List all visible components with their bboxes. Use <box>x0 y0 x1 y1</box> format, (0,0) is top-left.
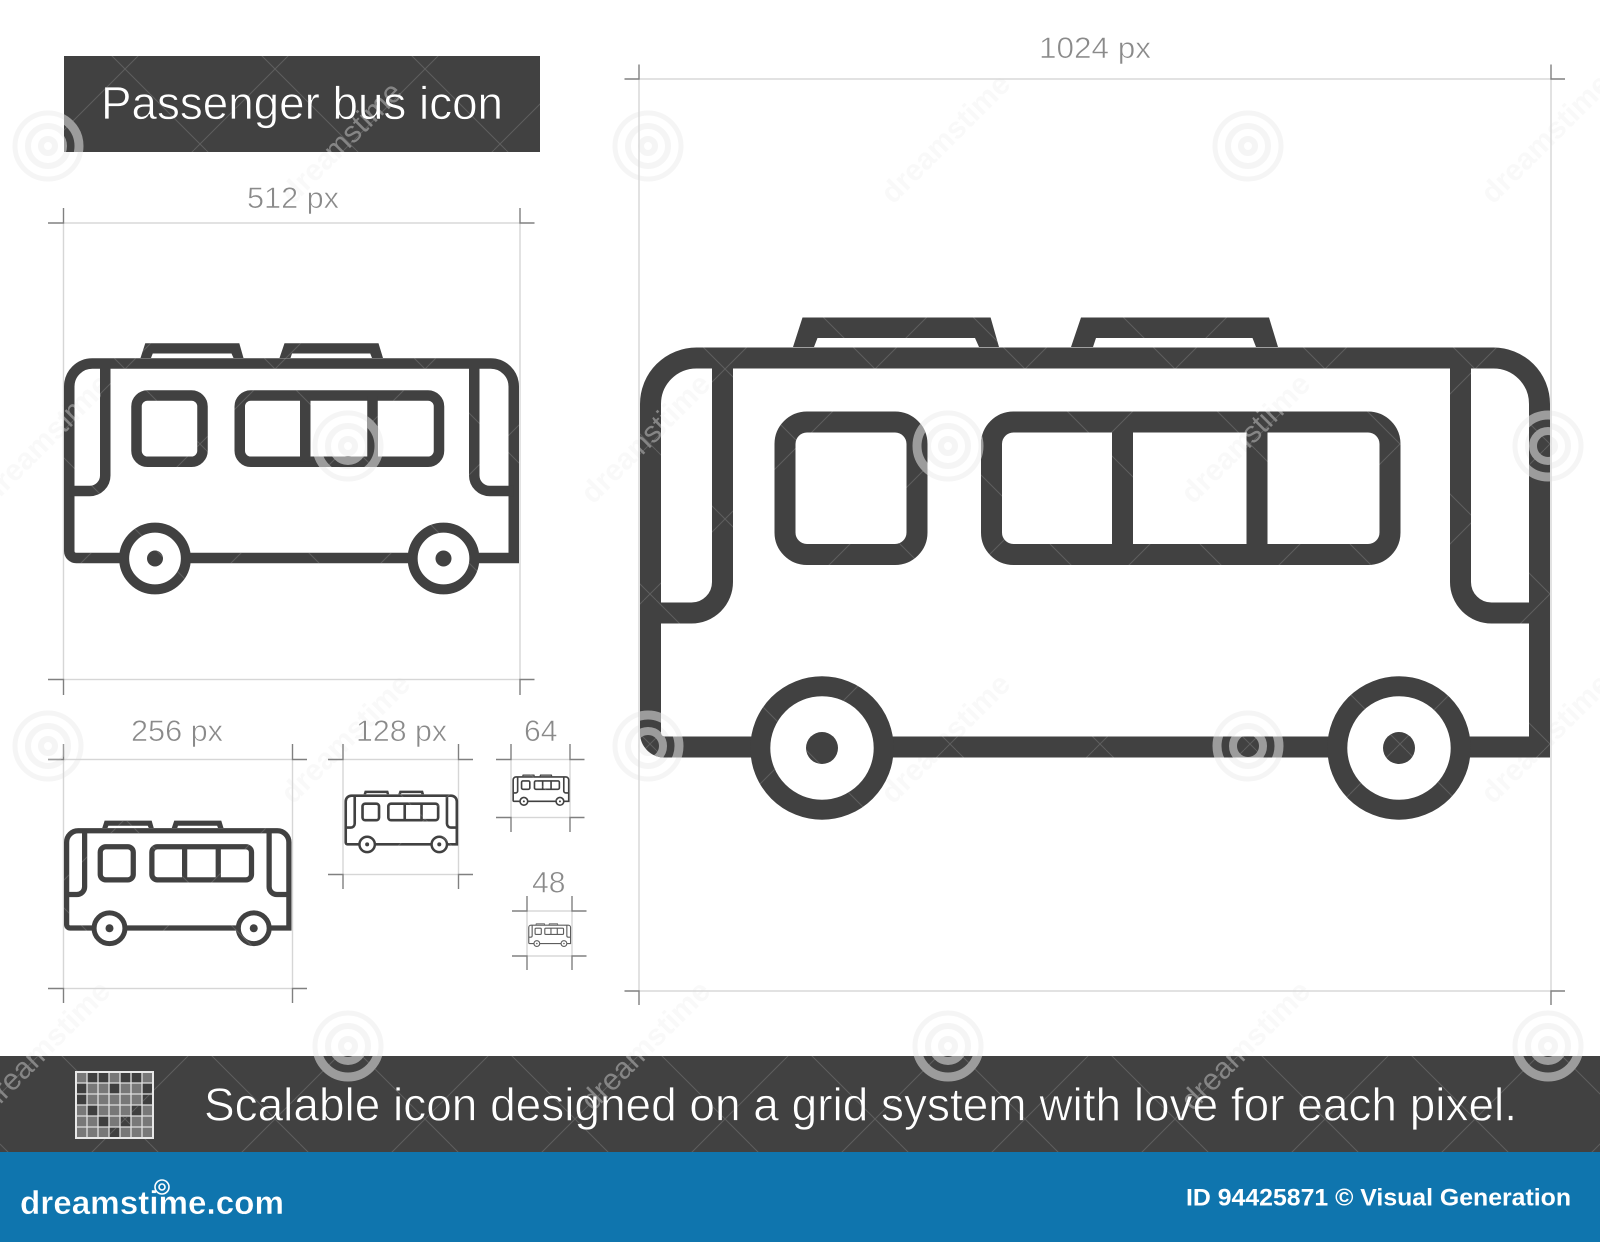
panel: 128 px icon <box>328 715 473 889</box>
dimension label: 64: 64 <box>524 715 558 748</box>
watermark: faint spirals and wordmarks: dreamstime <box>875 68 1017 210</box>
watermark overlay on dark areas: dreamstime <box>575 983 709 1117</box>
image ID and credit: ID 94425871 © Visual Generation <box>1186 1184 1571 1212</box>
title banner <box>64 56 540 152</box>
guides: 1024 px <box>624 64 1565 1005</box>
watermark: faint spirals and wordmarks: dreamstime <box>275 68 417 210</box>
watermark: faint spirals and wordmarks: dreamstime <box>1175 368 1317 510</box>
dimension label: 48: 48 <box>532 866 566 900</box>
guides: 512 px <box>48 208 534 695</box>
guides: 128 px <box>328 744 473 889</box>
dimension label: 512 px: 512 px <box>247 182 339 215</box>
watermark overlay on dark areas: dreamstime <box>575 376 709 510</box>
watermark overlay on dark areas: dreamstime <box>275 76 409 210</box>
icon: 128 px bus <box>346 791 457 852</box>
icon: pixel grid with heart <box>76 1072 153 1138</box>
dimension label: 128 px: 128 px <box>356 715 447 748</box>
icon: 48 px bus <box>529 923 571 946</box>
panel: 48 px icon <box>512 866 586 970</box>
icon: 64 px bus <box>513 774 569 805</box>
watermark overlay on dark areas: dreamstime <box>1175 376 1309 510</box>
watermark: faint spirals and wordmarks: dreamstime <box>575 975 717 1117</box>
title banner: Passenger bus icon <box>101 77 503 129</box>
panel: 512 px icon <box>48 182 534 695</box>
tagline: Scalable icon designed on a grid system with love for each pixel. <box>204 1078 1517 1130</box>
footer band: grid system message <box>0 1056 1600 1152</box>
watermark: faint spirals and wordmarks: dreamstime <box>1175 975 1317 1117</box>
guides: 256 px <box>48 744 307 1003</box>
watermark: faint spirals and wordmarks: dreamstime <box>575 368 717 510</box>
credit bar <box>0 1152 1600 1242</box>
panel: 1024 px icon <box>624 32 1565 1005</box>
dimension label: 256 px: 256 px <box>131 715 223 748</box>
logo wordmark: dreamstime.com <box>20 1184 284 1221</box>
panel: 256 px icon <box>48 715 307 1003</box>
icon: large bus <box>650 318 1540 810</box>
guides: 48 px <box>512 896 586 970</box>
panel: 64 px icon <box>496 715 584 832</box>
dimension label: 1024 px: 1024 px <box>1039 32 1151 65</box>
watermark: faint spirals and wordmarks: dreamstime <box>875 668 1017 810</box>
watermark: faint spirals and wordmarks: dreamstime <box>275 668 417 810</box>
icon: 256 px bus <box>67 821 289 944</box>
watermark overlay on dark areas: dreamstime <box>1175 983 1309 1117</box>
guides: 64 px <box>496 744 584 832</box>
icon: 512 px bus <box>69 343 514 589</box>
